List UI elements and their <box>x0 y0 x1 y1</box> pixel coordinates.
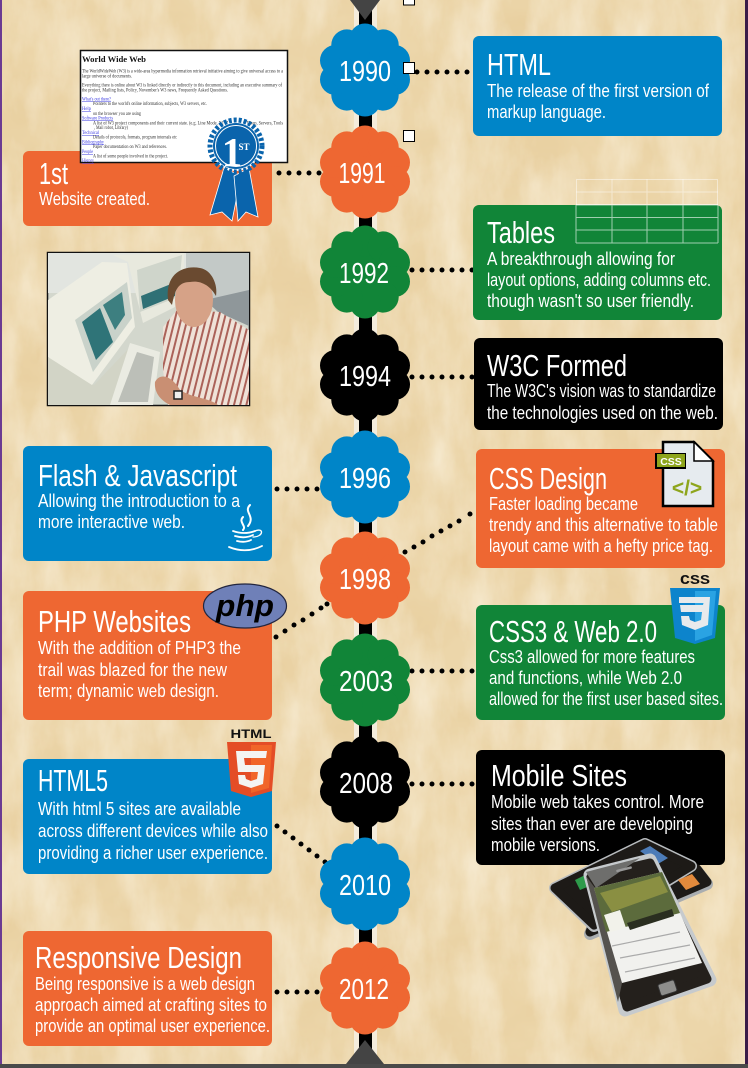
icon: Java cup <box>229 505 262 550</box>
year badge: 1994: 1994 <box>339 361 391 393</box>
text: CSS Design description <box>489 493 718 556</box>
image: first website screenshot: Details of protocols, formats, program internals etc <box>93 136 178 140</box>
image: first website screenshot: A list of W3 project components and their current state. (e.g. Line Mode, X11 Viola, NeXTStep, Servers, Tools <box>93 122 283 126</box>
heading: HTML5: HTML5 <box>38 763 108 798</box>
year badge: 1994 <box>320 328 410 422</box>
text: Flash description <box>38 490 241 532</box>
image: stacked smartphones <box>555 844 710 1010</box>
year badge: 1998 <box>320 532 410 624</box>
text: HTML5 description: across different devices while also <box>38 820 268 841</box>
icon: CSS file: </> <box>672 477 702 500</box>
heading: W3C Formed: W3C Formed <box>487 348 627 383</box>
text: Mobile description: Mobile web takes control. More <box>491 791 704 812</box>
year badge: 2003: 2003 <box>339 666 393 698</box>
text: Tables description <box>487 248 711 311</box>
image: first website screenshot: World Wide Web <box>82 54 146 64</box>
icon: CSS3 shield: CSS <box>680 573 710 589</box>
icon: HTML5 shield <box>227 727 276 797</box>
timeline spine <box>346 0 384 1064</box>
image: first website screenshot: History <box>82 159 94 164</box>
text: HTML5 description: providing a richer user experience. <box>38 842 268 863</box>
icon: CSS3 shield <box>670 573 720 644</box>
text: PHP description <box>38 637 241 701</box>
year badge: 2012 <box>320 942 410 1034</box>
text: W3C description <box>487 380 718 423</box>
text: HTML description: markup language. <box>487 101 606 122</box>
panel: Tables <box>473 205 722 320</box>
heading: 1st: 1st <box>39 156 68 191</box>
image: first website screenshot: Bibliography <box>82 140 104 146</box>
text: PHP description: trail was blazed for the new <box>38 659 228 680</box>
year badge: 1998: 1998 <box>339 564 391 596</box>
year badge: 2008: 2008 <box>339 768 393 800</box>
icon: first place ribbon: ST <box>238 142 250 152</box>
heading: Mobile Sites: Mobile Sites <box>491 758 627 793</box>
panel: Mobile Sites <box>476 750 725 865</box>
panel: HTML <box>473 36 722 136</box>
selection handles <box>404 0 414 142</box>
heading: Flash & Javascript: Flash & Javascript <box>38 458 237 493</box>
icon: CSS file <box>655 442 713 506</box>
text: Responsive description: Being responsive is a web design <box>35 973 255 994</box>
text: CSS3 description: Css3 allowed for more features <box>489 646 695 667</box>
image: first website screenshot: What's out there? <box>82 98 112 102</box>
panel: Flash and Javascript <box>23 446 272 561</box>
image: Tim Berners-Lee at his computer <box>48 252 250 406</box>
year badge: 1996: 1996 <box>339 463 391 495</box>
panel: HTML5 <box>23 727 276 874</box>
image: first website screenshot: Paper documentation on W3 and references. <box>93 145 167 150</box>
text: HTML5 description: With html 5 sites are available <box>38 798 241 819</box>
image: first website screenshot: People <box>82 150 94 155</box>
panel: CSS Design <box>476 442 725 568</box>
text: HTML5 description <box>38 798 268 863</box>
icon: first place ribbon <box>210 120 262 221</box>
text: PHP description: term; dynamic web design. <box>38 680 219 701</box>
year badge: 2010 <box>320 838 410 930</box>
image: first website screenshot: Technical <box>82 131 100 136</box>
icon: HTML5 shield: HTML <box>230 727 272 741</box>
text: Flash description: more interactive web. <box>38 511 185 532</box>
heading: Tables: Tables <box>487 215 555 250</box>
year badge: 1996 <box>320 430 410 524</box>
text: HTML description <box>487 80 710 122</box>
year badge: 2012: 2012 <box>339 974 389 1006</box>
image: first website screenshot: the project, Mailing lists, Policy, November's W3 news, Frequently Asked Questions. <box>82 88 228 94</box>
icon: PHP logo: php <box>215 588 274 623</box>
image: first website screenshot: Everything there is online about W3 is linked directly or indirectly to this document, including an executive summary of <box>82 84 282 88</box>
text: Responsive description: provide an optimal user experience. <box>35 1015 270 1036</box>
image: first website screenshot: large universe of documents. <box>82 74 132 80</box>
panel: PHP Websites <box>23 584 286 720</box>
text: Tables description: though wasn't so user friendly. <box>487 290 694 311</box>
panel: 1st website <box>23 151 272 226</box>
text: Mobile description: sites than ever are developing <box>491 813 693 834</box>
panel: W3C Formed <box>474 338 723 430</box>
text: CSS3 description: and functions, while Web 2.0 <box>489 667 682 688</box>
text: Flash description: Allowing the introduction to a <box>38 490 241 511</box>
year badge: 2003 <box>320 634 410 726</box>
image: first website screenshot: on the browser you are using <box>93 112 141 117</box>
panel: Responsive Design <box>23 931 272 1046</box>
year badge: 1992: 1992 <box>339 258 389 290</box>
connector dots <box>274 70 474 994</box>
heading: CSS Design: CSS Design <box>489 461 607 496</box>
heading: CSS3 & Web 2.0: CSS3 & Web 2.0 <box>489 614 657 649</box>
image: first website screenshot: A list of some people involved in the project. <box>93 154 168 160</box>
image: first website screenshot: Pointers to the world's online information, subjects, W3 servers, etc. <box>93 102 207 107</box>
heading: PHP Websites: PHP Websites <box>38 604 191 639</box>
heading: HTML: HTML <box>487 47 551 82</box>
year badge: 1990: 1990 <box>339 56 391 88</box>
text: PHP description: With the addition of PHP3 the <box>38 637 241 658</box>
image: first website screenshot: Software Products <box>82 116 113 122</box>
text: Mobile description <box>491 791 704 855</box>
year badge: 1991 <box>320 126 410 218</box>
text: CSS Design description: Faster loading became <box>489 493 638 514</box>
icon: first place ribbon: 1 <box>222 129 242 175</box>
icon: PHP logo <box>204 584 286 628</box>
heading: Responsive Design: Responsive Design <box>35 940 242 975</box>
image: first website screenshot: , Mail robot, Library) <box>94 126 128 131</box>
year badge: 1991: 1991 <box>338 158 386 190</box>
year badge: 1992 <box>320 226 410 318</box>
text: Tables description: A breakthrough allowing for <box>487 248 675 269</box>
text: Responsive description <box>35 973 270 1036</box>
text: CSS3 description <box>489 646 723 709</box>
text: Mobile description: mobile versions. <box>491 834 600 855</box>
image: table grid graphic <box>576 179 718 242</box>
text: website created: Website created. <box>39 188 150 209</box>
icon: CSS file: CSS <box>660 456 682 468</box>
year badge: 2008 <box>320 736 410 828</box>
year badge: 1990 <box>320 24 410 116</box>
year badge: 2010: 2010 <box>339 870 391 902</box>
panel: CSS3 and Web 2.0 <box>476 573 725 720</box>
image: first website screenshot: The WorldWideWeb (W3) is a wide-area hypermedia information retrieval initiative aiming to give universal access to a <box>82 70 284 74</box>
image: first website screenshot: Help <box>82 107 91 112</box>
image: first website screenshot <box>80 50 288 164</box>
text: Responsive description: approach aimed at crafting sites to <box>35 994 267 1015</box>
